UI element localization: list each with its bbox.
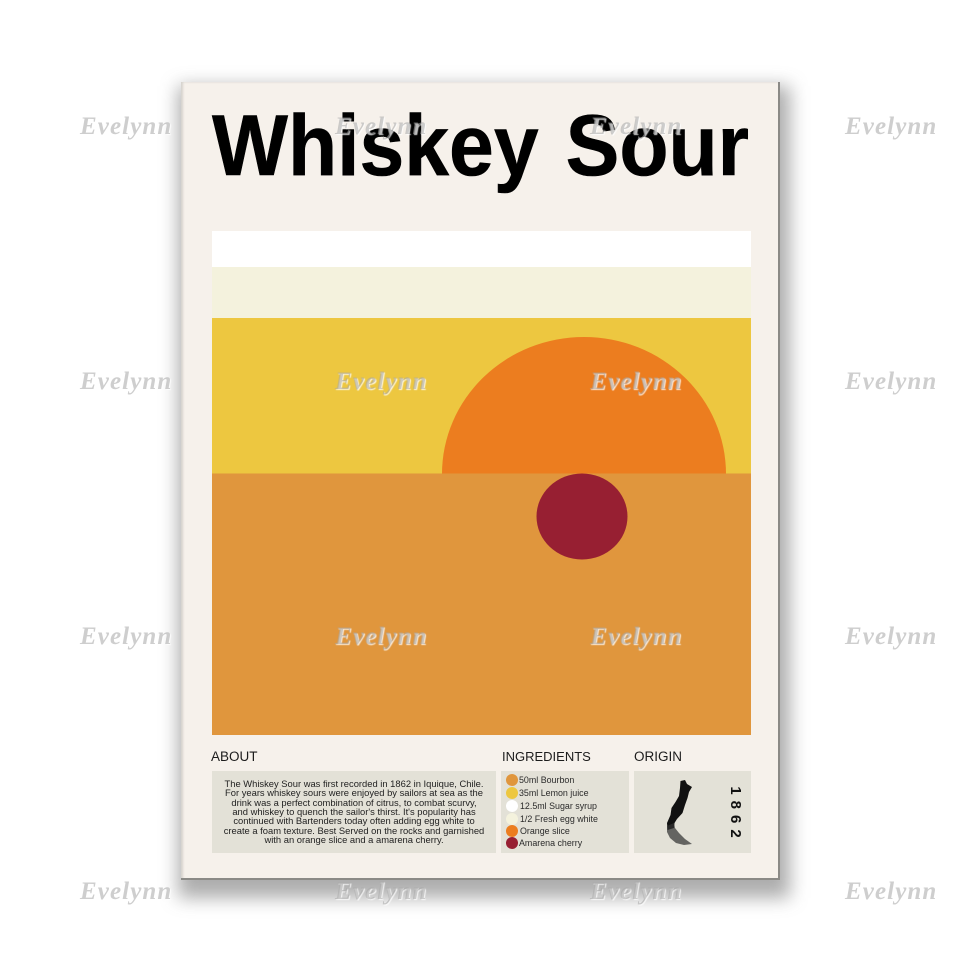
- about text: drink was a perfect combination of citrus, to combat scurvy,: [231, 797, 477, 808]
- watermark row 3: [80, 623, 937, 651]
- about text: with an orange slice and a amarena cherry.: [264, 834, 444, 845]
- watermark row 4: Evelynn: [80, 878, 172, 905]
- ingredient: sugar syrup: 12.5ml Sugar syrup: [520, 801, 597, 811]
- bourbon layer: [212, 474, 751, 735]
- ingredient: egg white: 1/2 Fresh egg white: [520, 814, 598, 824]
- amarena cherry: [536, 474, 628, 560]
- glass rim: [212, 231, 751, 267]
- heading: about: ABOUT: [211, 749, 258, 764]
- ingredient: orange slice: Orange slice: [520, 826, 570, 836]
- watermark row 4: Evelynn: [590, 878, 682, 905]
- egg white foam: [212, 267, 751, 318]
- watermark row 2: [80, 368, 937, 396]
- ingredient: lemon juice: 35ml Lemon juice: [519, 788, 589, 798]
- panel: ingredients: [501, 771, 629, 853]
- orange slice: [442, 337, 726, 474]
- watermark row 1: Evelynn: [80, 113, 172, 140]
- watermark row 2: Evelynn: [80, 368, 172, 395]
- about text: continued with Bartenders today often adding egg white to: [233, 815, 475, 826]
- about text: [224, 778, 484, 845]
- watermark row 2: Evelynn: [590, 368, 682, 395]
- watermark row 1: Evelynn: [845, 113, 937, 140]
- about text: and whiskey to quench the sailor's thirst. It's popularity has: [232, 806, 476, 817]
- heading: origin: ORIGIN: [634, 749, 682, 764]
- ingredient: bourbon: [506, 774, 574, 786]
- watermark row 3: Evelynn: [845, 623, 937, 650]
- map of Chile: [667, 780, 692, 845]
- canvas drop shadow: [178, 86, 790, 898]
- ingredient: amarena cherry: Amarena cherry: [519, 838, 582, 848]
- panel: about: [212, 771, 496, 853]
- watermark row 1: Evelynn: [335, 113, 427, 140]
- watermark row 1: Evelynn: [590, 113, 682, 140]
- title: Whiskey Sour: [212, 98, 749, 194]
- watermark row 3: Evelynn: [590, 623, 682, 650]
- ingredient: orange slice: [506, 825, 570, 837]
- poster canvas: [181, 82, 780, 880]
- watermark row 3: Evelynn: [335, 623, 427, 650]
- year 1862: 1862: [727, 786, 744, 844]
- watermark row 4: Evelynn: [845, 878, 937, 905]
- about text: For years whiskey sours were enjoyed by sailors at sea as the: [225, 787, 483, 798]
- about text: create a foam texture. Best Served on the rocks and garnished: [224, 825, 484, 836]
- watermark row 4: Evelynn: [335, 878, 427, 905]
- ingredient: bourbon: 50ml Bourbon: [519, 775, 574, 785]
- about text: The Whiskey Sour was first recorded in 1862 in Iquique, Chile.: [224, 778, 483, 789]
- lemon juice layer: [212, 318, 751, 474]
- watermark row 2: Evelynn: [335, 368, 427, 395]
- heading: ingredients: INGREDIENTS: [502, 749, 591, 764]
- watermark row 1: [80, 113, 937, 140]
- watermark row 4: [80, 878, 937, 906]
- watermark row 2: Evelynn: [845, 368, 937, 395]
- ingredient: amarena cherry: [506, 837, 582, 849]
- watermark row 3: Evelynn: [80, 623, 172, 650]
- panel: origin: [634, 771, 751, 853]
- illustration: whiskey sour glass: [212, 231, 751, 735]
